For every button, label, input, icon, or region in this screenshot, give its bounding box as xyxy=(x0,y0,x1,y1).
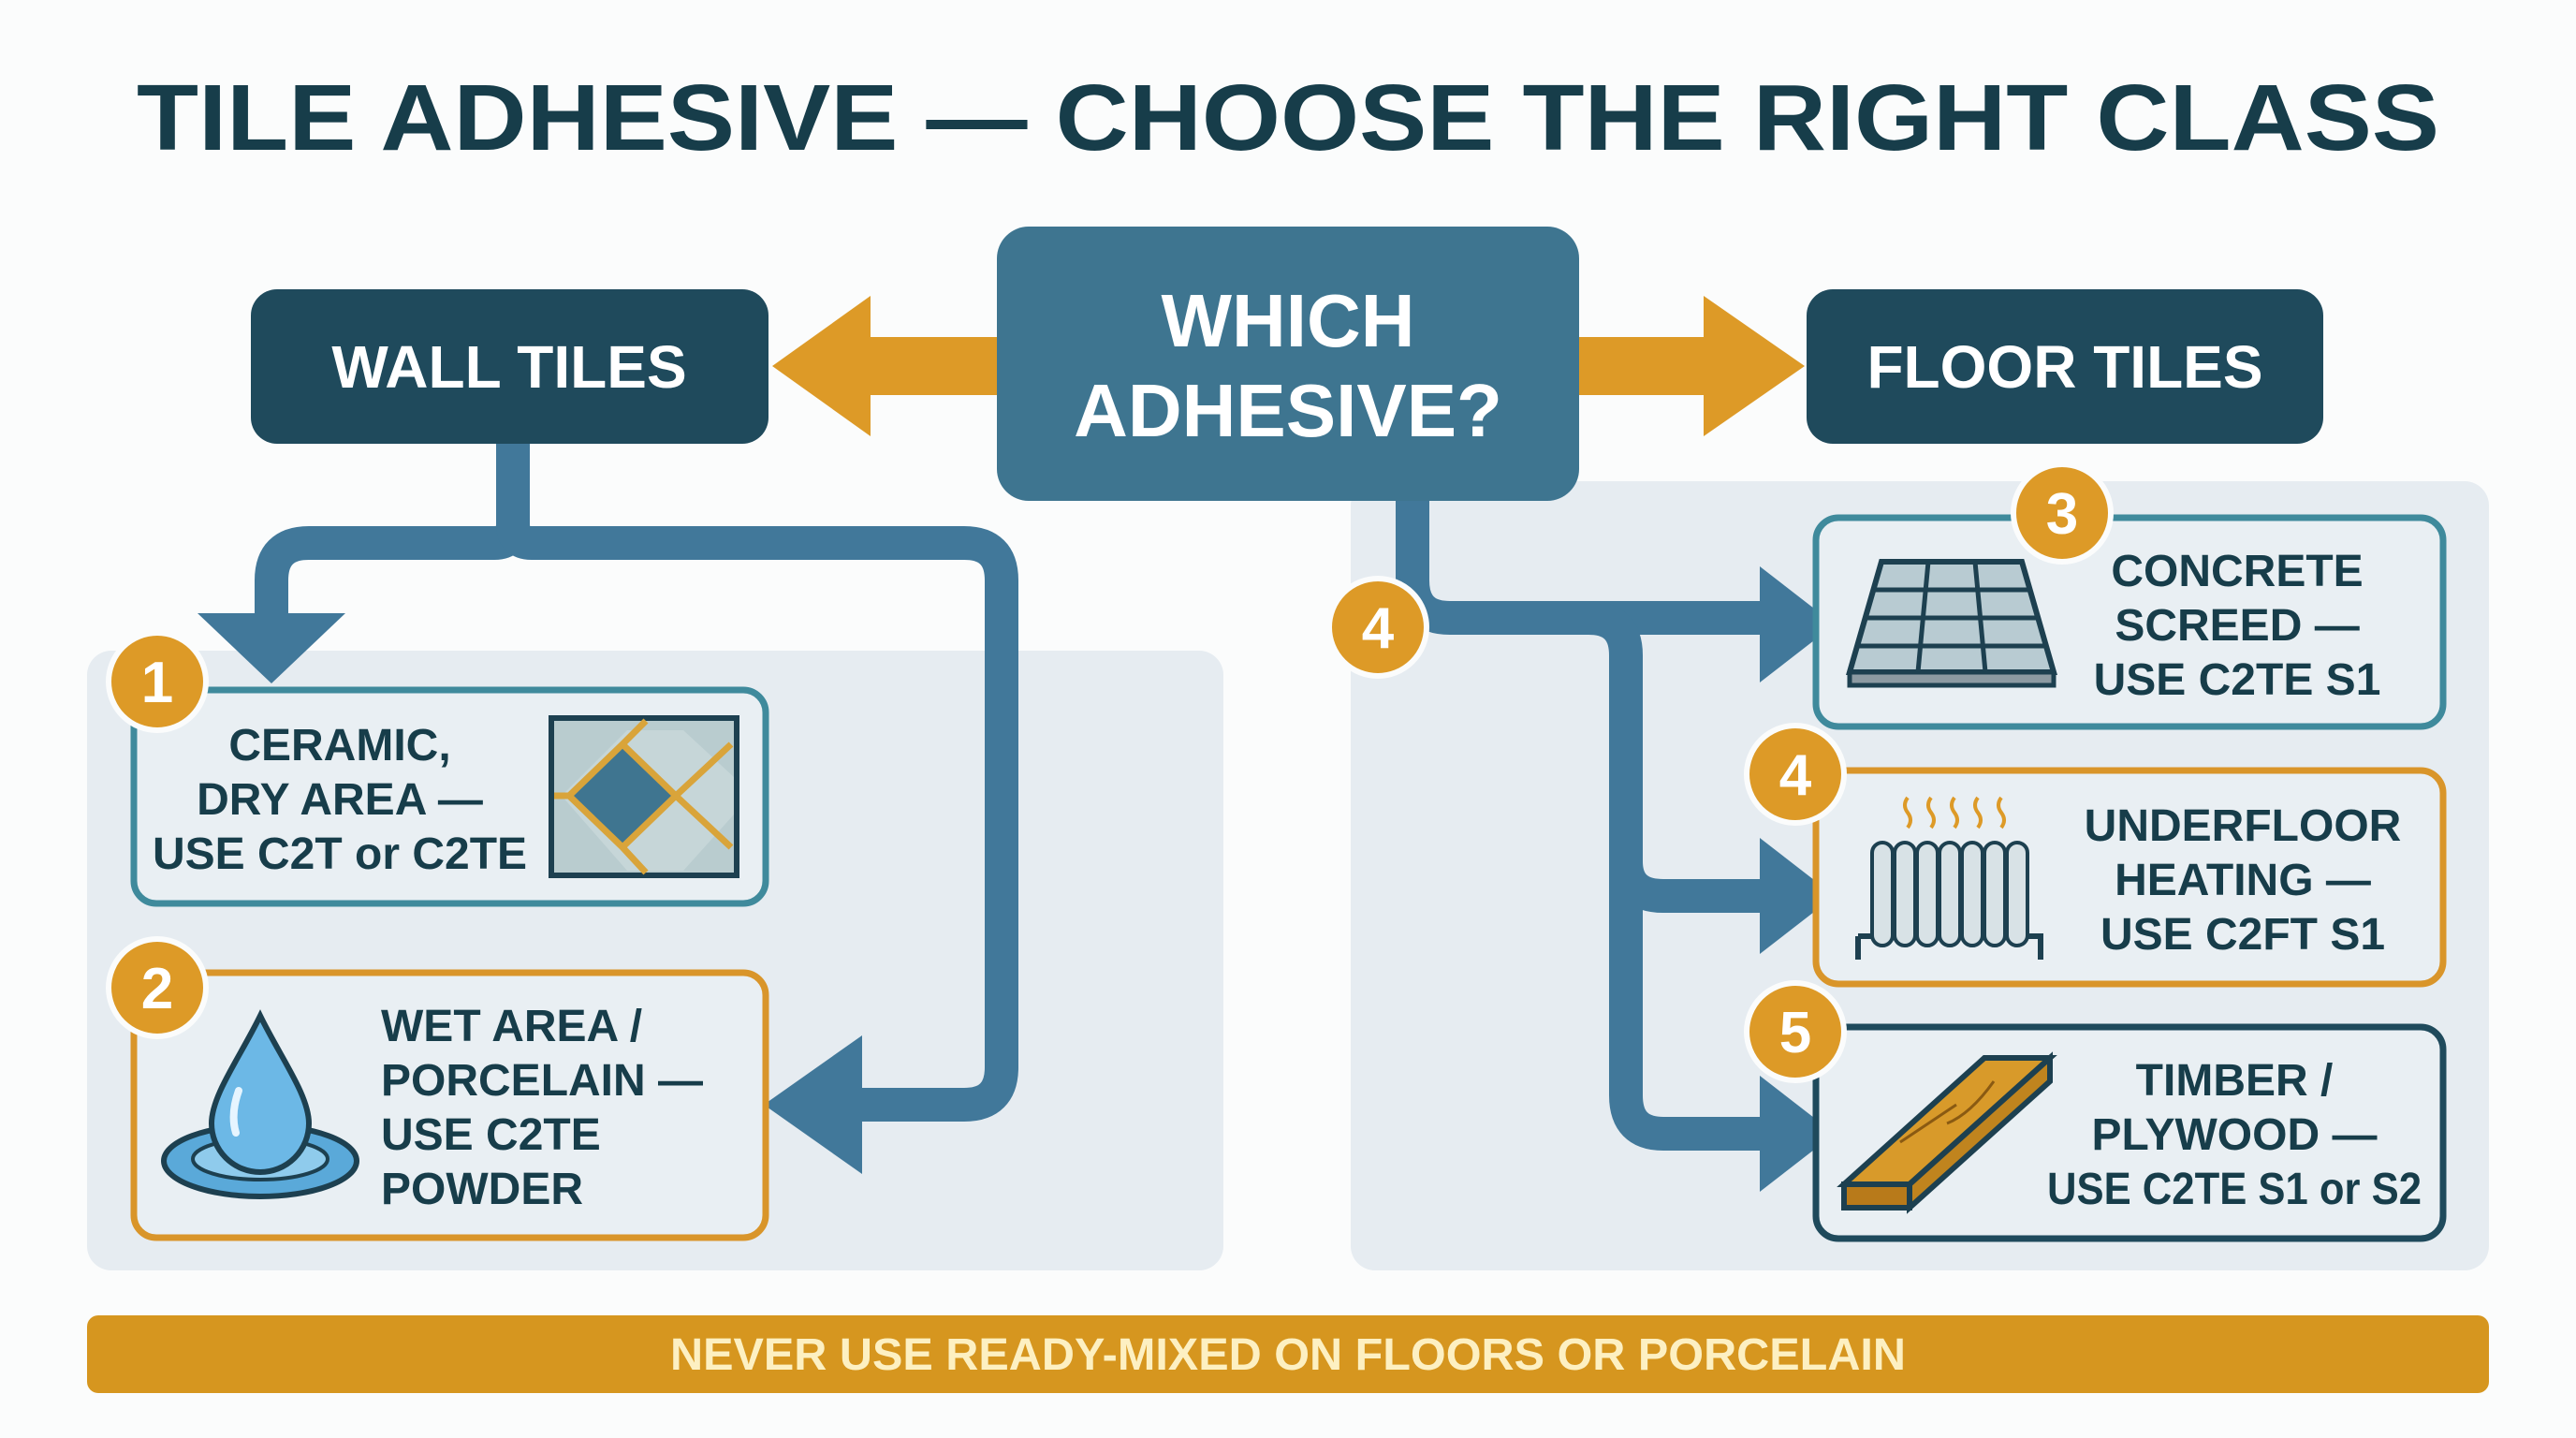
icon: radiator xyxy=(1858,798,2041,960)
card 2: wet area xyxy=(109,939,766,1238)
badge 4 on connector xyxy=(1329,579,1427,676)
badge 4 on connector: 4 xyxy=(1362,596,1395,661)
badge 5: 5 xyxy=(1779,1001,1811,1065)
card 4: underfloor heating: HEATING — xyxy=(2115,856,2371,905)
badge 4 xyxy=(1747,726,1844,823)
card 5: timber plywood: USE C2TE S1 or S2 xyxy=(2047,1165,2422,1214)
card 3: concrete screed: CONCRETE xyxy=(2111,547,2364,596)
badge 3: 3 xyxy=(2046,482,2078,547)
box: wall tiles: WALL TILES xyxy=(331,333,687,401)
card 2: wet area: WET AREA / xyxy=(381,1002,642,1051)
box: which adhesive: WHICH xyxy=(1161,279,1415,362)
card 1: ceramic dry area: CERAMIC, xyxy=(228,721,451,770)
box: which adhesive xyxy=(997,227,1579,501)
badge 2 xyxy=(109,939,206,1036)
badge 1 xyxy=(109,633,206,730)
connector: floor branches xyxy=(1412,501,1769,1134)
card 5: timber plywood: TIMBER / xyxy=(2136,1056,2333,1106)
box: wall tiles xyxy=(251,289,768,444)
arrowhead: to card 1 xyxy=(198,613,345,683)
arrow: to floor tiles xyxy=(1573,296,1805,436)
card 2: wet area: USE C2TE xyxy=(381,1110,601,1160)
badge 5 xyxy=(1747,983,1844,1080)
panel: floor background xyxy=(1351,481,2489,1270)
card 5: timber plywood xyxy=(1747,983,2443,1239)
card 2: wet area: PORCELAIN — xyxy=(381,1056,703,1106)
card 1: ceramic dry area: DRY AREA — xyxy=(197,775,483,825)
badge 2: 2 xyxy=(141,957,173,1021)
card 3: concrete screed xyxy=(1816,464,2443,726)
icon: tile xyxy=(551,718,737,875)
card 1: ceramic dry area xyxy=(109,633,766,903)
card 3: concrete screed: USE C2TE S1 xyxy=(2094,655,2380,705)
icon: floor grid xyxy=(1850,562,2054,685)
badge 1: 1 xyxy=(141,651,173,715)
arrow: to wall tiles xyxy=(772,296,1002,436)
badge 4: 4 xyxy=(1779,743,1812,808)
card 4: underfloor heating: USE C2FT S1 xyxy=(2100,910,2385,960)
icon: water drop xyxy=(164,1016,357,1196)
arrowheads: floor cards xyxy=(1760,566,1835,1192)
box: floor tiles: FLOOR TILES xyxy=(1866,333,2263,401)
card 5: timber plywood: PLYWOOD — xyxy=(2092,1110,2377,1160)
panel: wall background xyxy=(87,651,1223,1270)
icon: plank xyxy=(1844,1058,2050,1208)
card 2: wet area: POWDER xyxy=(381,1165,583,1214)
card 4: underfloor heating xyxy=(1747,726,2443,984)
card 4: underfloor heating: UNDERFLOOR xyxy=(2085,801,2401,851)
warning bar xyxy=(87,1315,2489,1393)
card 1: ceramic dry area: USE C2T or C2TE xyxy=(153,829,527,879)
box: floor tiles xyxy=(1807,289,2323,444)
box: which adhesive: ADHESIVE? xyxy=(1074,369,1502,452)
card 3: concrete screed: SCREED — xyxy=(2115,601,2360,651)
connector: wall branches xyxy=(271,444,1002,1105)
badge 3 xyxy=(2013,464,2111,562)
arrowhead: to card 2 xyxy=(764,1035,862,1174)
title: TILE ADHESIVE — CHOOSE THE RIGHT CLASS xyxy=(137,66,2439,170)
warning bar: NEVER USE READY-MIXED ON FLOORS OR PORCELAIN xyxy=(670,1330,1906,1380)
